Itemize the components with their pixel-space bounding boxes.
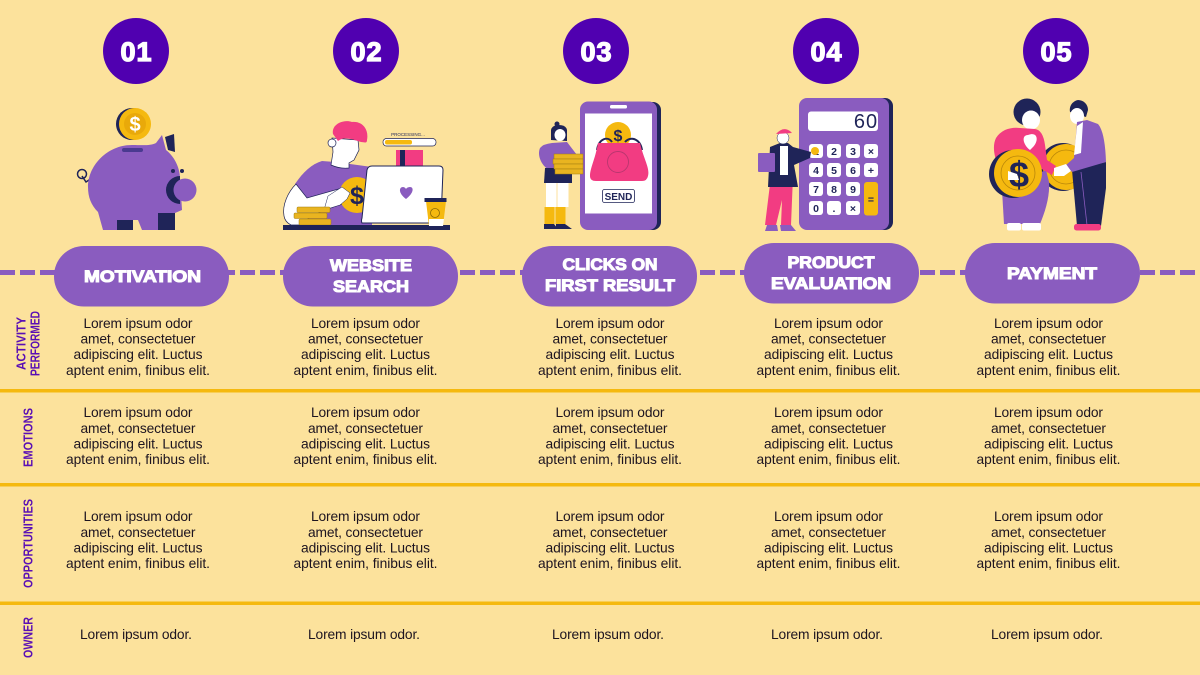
row label: activity performed: ACTIVITY: [14, 316, 28, 370]
icon: calculator and man: 5: [831, 165, 837, 177]
opportunities text column 2: adipiscing elit. Luctus: [301, 540, 430, 556]
icon: two people exchanging coins: [989, 98, 1106, 230]
icon: calculator and man: 7: [813, 184, 819, 196]
step number 03: [563, 18, 629, 84]
step pill: product evaluation: EVALUATION: [771, 274, 891, 293]
row label: activity performed: [14, 311, 42, 376]
activity text column 4: Lorem ipsum odor: [774, 316, 883, 331]
owner text column 1: Lorem ipsum odor.: [80, 627, 192, 642]
owner text column 2: Lorem ipsum odor.: [308, 627, 420, 642]
step pill: clicks on first result: CLICKS ON: [562, 255, 658, 274]
icon: calculator and man: ×: [850, 203, 856, 215]
emotions text column 1: aptent enim, finibus elit.: [66, 452, 210, 467]
icon: calculator and man: 2: [831, 146, 837, 158]
icon: calculator and man: 8: [831, 184, 837, 196]
activity text column 1: aptent enim, finibus elit.: [66, 363, 210, 378]
opportunities text column 4: amet, consectetuer: [771, 525, 886, 540]
step pill: clicks on first result: FIRST RESULT: [545, 276, 676, 295]
step number 03: 03: [580, 37, 613, 67]
opportunities text column 4: adipiscing elit. Luctus: [764, 540, 893, 556]
step pill: product evaluation: [744, 243, 919, 304]
emotions text column 3: amet, consectetuer: [552, 421, 668, 436]
activity text column 2: aptent enim, finibus elit.: [294, 363, 438, 378]
emotions text column 1: Lorem ipsum odor: [84, 405, 193, 420]
step number 01: [103, 18, 169, 84]
step number 01: 01: [120, 37, 153, 67]
icon: person paying on laptop: [283, 121, 450, 230]
icon: phone with purse and woman: [539, 102, 661, 230]
emotions text column 4: aptent enim, finibus elit.: [756, 452, 900, 467]
activity text column 3: [538, 316, 682, 378]
emotions text column 1: amet, consectetuer: [80, 421, 196, 436]
icon: calculator and man: +: [868, 165, 874, 177]
row label: opportunities: OPPORTUNITIES: [22, 499, 36, 588]
activity text column 2: [294, 316, 438, 378]
opportunities text column 2: [294, 509, 438, 571]
emotions text column 5: amet, consectetuer: [991, 421, 1106, 436]
emotions text column 5: [976, 405, 1120, 467]
activity text column 5: amet, consectetuer: [991, 332, 1106, 346]
step number 04: 04: [810, 37, 843, 67]
icon: calculator and man: =: [868, 194, 874, 206]
opportunities text column 2: Lorem ipsum odor: [311, 509, 420, 524]
emotions text column 4: [756, 405, 900, 467]
step pill: payment: [965, 243, 1140, 304]
opportunities text column 3: adipiscing elit. Luctus: [546, 540, 675, 556]
activity text column 2: Lorem ipsum odor: [311, 316, 420, 331]
icon: phone with purse and woman: SEND: [605, 192, 632, 203]
emotions text column 5: aptent enim, finibus elit.: [976, 452, 1120, 467]
emotions text column 1: [66, 405, 210, 467]
emotions text column 5: adipiscing elit. Luctus: [984, 436, 1113, 452]
opportunities text column 4: [756, 509, 900, 571]
activity text column 4: aptent enim, finibus elit.: [756, 363, 900, 378]
icon: person paying on laptop: PROCESSING...: [391, 132, 425, 137]
icon: calculator and man: 4: [813, 165, 819, 177]
icon: person paying on laptop: $: [350, 182, 364, 210]
activity text column 4: [756, 316, 900, 378]
step pill: motivation: MOTIVATION: [84, 267, 201, 286]
icon: calculator and man: 9: [850, 184, 856, 196]
emotions text column 3: Lorem ipsum odor: [556, 405, 665, 420]
opportunities text column 2: aptent enim, finibus elit.: [294, 556, 438, 571]
activity text column 4: amet, consectetuer: [771, 332, 886, 346]
icon: calculator and man: [758, 98, 893, 231]
emotions text column 2: adipiscing elit. Luctus: [301, 436, 430, 452]
activity text column 3: aptent enim, finibus elit.: [538, 363, 682, 378]
icon: calculator and man: 6: [850, 165, 856, 177]
opportunities text column 4: Lorem ipsum odor: [774, 509, 883, 524]
activity text column 5: adipiscing elit. Luctus: [984, 347, 1113, 362]
opportunities text column 3: Lorem ipsum odor: [556, 509, 665, 524]
activity text column 3: adipiscing elit. Luctus: [546, 347, 675, 362]
emotions text column 3: aptent enim, finibus elit.: [538, 452, 682, 467]
activity text column 1: adipiscing elit. Luctus: [74, 347, 203, 362]
emotions text column 4: Lorem ipsum odor: [774, 405, 883, 420]
step pill: website search: SEARCH: [333, 277, 409, 296]
activity text column 1: [66, 316, 210, 378]
step pill: product evaluation: PRODUCT: [788, 253, 875, 272]
opportunities text column 3: aptent enim, finibus elit.: [538, 556, 682, 571]
icon: calculator and man: 0: [813, 203, 819, 215]
opportunities text column 5: Lorem ipsum odor: [994, 509, 1103, 524]
activity text column 5: Lorem ipsum odor: [994, 316, 1103, 331]
emotions text column 2: aptent enim, finibus elit.: [294, 452, 438, 467]
owner text column 5: Lorem ipsum odor.: [991, 627, 1103, 642]
opportunities text column 5: amet, consectetuer: [991, 525, 1106, 540]
emotions text column 4: adipiscing elit. Luctus: [764, 436, 893, 452]
step number 05: [1023, 18, 1089, 84]
activity text column 4: adipiscing elit. Luctus: [764, 347, 893, 362]
row label: activity performed: PERFORMED: [28, 311, 42, 376]
icon: two people exchanging coins: $: [1009, 154, 1029, 195]
step pill: website search: [283, 246, 458, 306]
owner text column 4: Lorem ipsum odor.: [771, 627, 883, 642]
opportunities text column 3: [538, 509, 682, 571]
step number 04: [793, 18, 859, 84]
step pill: motivation: [54, 246, 229, 306]
emotions text column 3: adipiscing elit. Luctus: [546, 436, 675, 452]
step number 02: [333, 18, 399, 84]
opportunities text column 4: aptent enim, finibus elit.: [756, 556, 900, 571]
activity text column 1: amet, consectetuer: [80, 332, 196, 346]
activity text column 5: aptent enim, finibus elit.: [976, 363, 1120, 378]
icon: calculator and man: ×: [868, 146, 874, 158]
emotions text column 1: adipiscing elit. Luctus: [74, 436, 203, 452]
activity text column 2: amet, consectetuer: [308, 332, 423, 346]
icon: calculator and man: 3: [850, 146, 856, 158]
opportunities text column 1: aptent enim, finibus elit.: [66, 556, 210, 571]
row label: emotions: EMOTIONS: [22, 408, 36, 467]
step pill: payment: PAYMENT: [1007, 264, 1098, 283]
step number 02: 02: [350, 37, 383, 67]
opportunities text column 1: Lorem ipsum odor: [84, 509, 193, 524]
activity text column 5: [976, 316, 1120, 378]
step number 05: 05: [1040, 37, 1073, 67]
opportunities text column 5: aptent enim, finibus elit.: [976, 556, 1120, 571]
icon: phone with purse and woman: $: [614, 128, 623, 145]
icon: piggy bank with coin: [78, 108, 196, 230]
activity text column 1: Lorem ipsum odor: [84, 316, 193, 331]
opportunities text column 1: amet, consectetuer: [80, 525, 196, 540]
row label: owner: OWNER: [22, 617, 36, 658]
icon: calculator and man: 60: [854, 111, 878, 133]
icon: piggy bank with coin: $: [129, 114, 141, 136]
emotions text column 5: Lorem ipsum odor: [994, 405, 1103, 420]
emotions text column 2: [294, 405, 438, 467]
step pill: clicks on first result: [522, 246, 697, 306]
activity text column 3: Lorem ipsum odor: [556, 316, 665, 331]
opportunities text column 5: [976, 509, 1120, 571]
icon: calculator and man: 1: [813, 146, 819, 158]
opportunities text column 5: adipiscing elit. Luctus: [984, 540, 1113, 556]
activity text column 2: adipiscing elit. Luctus: [301, 347, 430, 362]
opportunities text column 3: amet, consectetuer: [552, 525, 668, 540]
emotions text column 2: Lorem ipsum odor: [311, 405, 420, 420]
emotions text column 2: amet, consectetuer: [308, 421, 423, 436]
activity text column 3: amet, consectetuer: [552, 332, 668, 346]
opportunities text column 1: [66, 509, 210, 571]
emotions text column 4: amet, consectetuer: [771, 421, 886, 436]
opportunities text column 2: amet, consectetuer: [308, 525, 423, 540]
step pill: website search: WEBSITE: [330, 256, 412, 275]
owner text column 3: Lorem ipsum odor.: [552, 627, 664, 642]
icon: calculator and man: .: [833, 203, 836, 215]
opportunities text column 1: adipiscing elit. Luctus: [74, 540, 203, 556]
emotions text column 3: [538, 405, 682, 467]
